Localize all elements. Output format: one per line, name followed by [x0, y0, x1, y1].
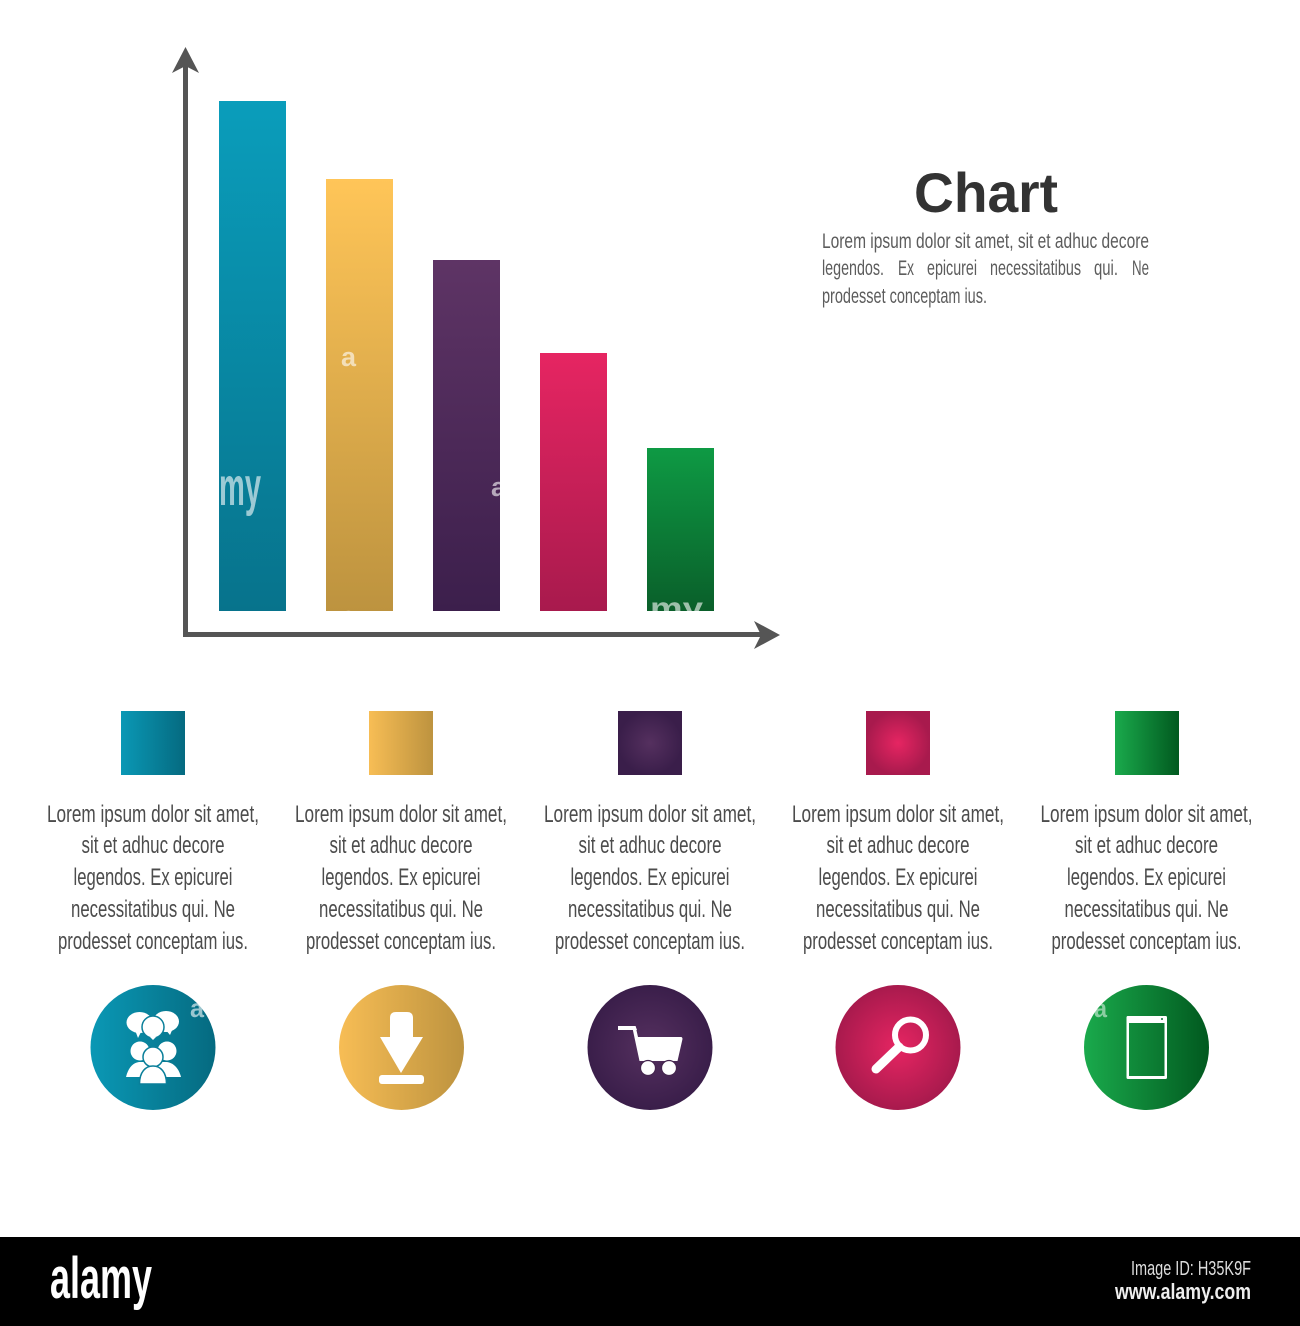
text block 1: Lorem ipsum dolor sit amet, — [47, 801, 259, 828]
text block 4: necessitatibus qui. Ne — [816, 896, 980, 923]
watermark fragments on bars: a — [341, 342, 357, 372]
bar 4 pink — [540, 353, 607, 611]
website: www.alamy.com — [1114, 1279, 1251, 1304]
chart description: prodesset conceptam ius. — [822, 285, 987, 308]
column 1 teal — [47, 711, 259, 1110]
text block 3: necessitatibus qui. Ne — [568, 896, 732, 923]
text block 3: prodesset conceptam ius. — [555, 928, 745, 955]
text block 1: necessitatibus qui. Ne — [71, 896, 235, 923]
column 3 purple — [544, 711, 756, 1110]
icon: magnifier — [836, 985, 960, 1110]
footer logo: alamy — [50, 1246, 152, 1311]
icon: tablet — [1084, 985, 1209, 1110]
chart description: necessitatibus — [990, 257, 1081, 280]
text block 4: sit et adhuc decore — [826, 832, 970, 859]
legend square yellow — [369, 711, 433, 775]
text block 5: necessitatibus qui. Ne — [1064, 896, 1228, 923]
chart description: epicurei — [927, 257, 977, 280]
text block 2: legendos. Ex epicurei — [322, 864, 480, 891]
text block 3: sit et adhuc decore — [578, 832, 722, 859]
text block 4: prodesset conceptam ius. — [803, 928, 993, 955]
text block 2: sit et adhuc decore — [330, 832, 472, 859]
text block 4: legendos. Ex epicurei — [818, 864, 978, 891]
chart description — [822, 230, 1149, 308]
text block 1: legendos. Ex epicurei — [74, 864, 232, 891]
text block 5: legendos. Ex epicurei — [1067, 864, 1226, 891]
column 5 green — [1040, 711, 1252, 1110]
watermark fragments on bars: my — [219, 457, 261, 517]
text block 5: sit et adhuc decore — [1075, 832, 1218, 859]
footer band — [0, 1237, 1300, 1326]
legend square green — [1115, 711, 1179, 775]
watermark fragments on bars: my — [650, 592, 703, 625]
text block 4: Lorem ipsum dolor sit amet, — [792, 801, 1004, 828]
text block 4 — [792, 801, 1004, 955]
legend square pink — [866, 711, 930, 775]
column 4 pink — [792, 711, 1004, 1110]
icon: people talking: a — [190, 993, 205, 1023]
watermark fragments on bars: a — [491, 472, 507, 502]
chart title: Chart — [914, 161, 1058, 224]
text block 3: legendos. Ex epicurei — [570, 864, 730, 891]
text block 1: prodesset conceptam ius. — [58, 928, 248, 955]
bar 3 purple — [433, 260, 500, 611]
bar 2 yellow — [326, 179, 393, 611]
chart description: qui. — [1094, 257, 1118, 280]
text block 2: necessitatibus qui. Ne — [319, 896, 483, 923]
text block 1: sit et adhuc decore — [82, 832, 224, 859]
text block 2 — [295, 801, 507, 955]
image id: Image ID: H35K9F — [1131, 1258, 1251, 1280]
icon: people talking — [90, 985, 216, 1110]
text block 2: Lorem ipsum dolor sit amet, — [295, 801, 507, 828]
x axis arrow — [183, 621, 780, 649]
bar chart — [172, 47, 780, 649]
chart description: Ex — [898, 257, 914, 280]
icon: shopping cart — [588, 985, 712, 1110]
watermark fragments on bars — [220, 352, 703, 611]
text block 3: Lorem ipsum dolor sit amet, — [544, 801, 756, 828]
text block 5 — [1040, 801, 1252, 955]
legend square teal — [121, 711, 185, 775]
text block 3 — [544, 801, 756, 955]
icon: download — [339, 985, 464, 1110]
legend square purple — [618, 711, 682, 775]
text block 1 — [47, 801, 259, 955]
bar 1 teal — [219, 101, 286, 611]
chart description: Lorem ipsum dolor sit amet, sit et adhuc decore — [822, 230, 1149, 253]
column 2 yellow — [295, 711, 507, 1110]
chart description: legendos. — [822, 257, 884, 280]
icon: tablet: a — [1094, 993, 1107, 1023]
y axis arrow — [172, 47, 199, 637]
watermark fragments on bars: a — [341, 601, 357, 631]
text block 2: prodesset conceptam ius. — [306, 928, 496, 955]
bar 5 green — [647, 448, 714, 611]
chart description: Ne — [1132, 257, 1149, 280]
